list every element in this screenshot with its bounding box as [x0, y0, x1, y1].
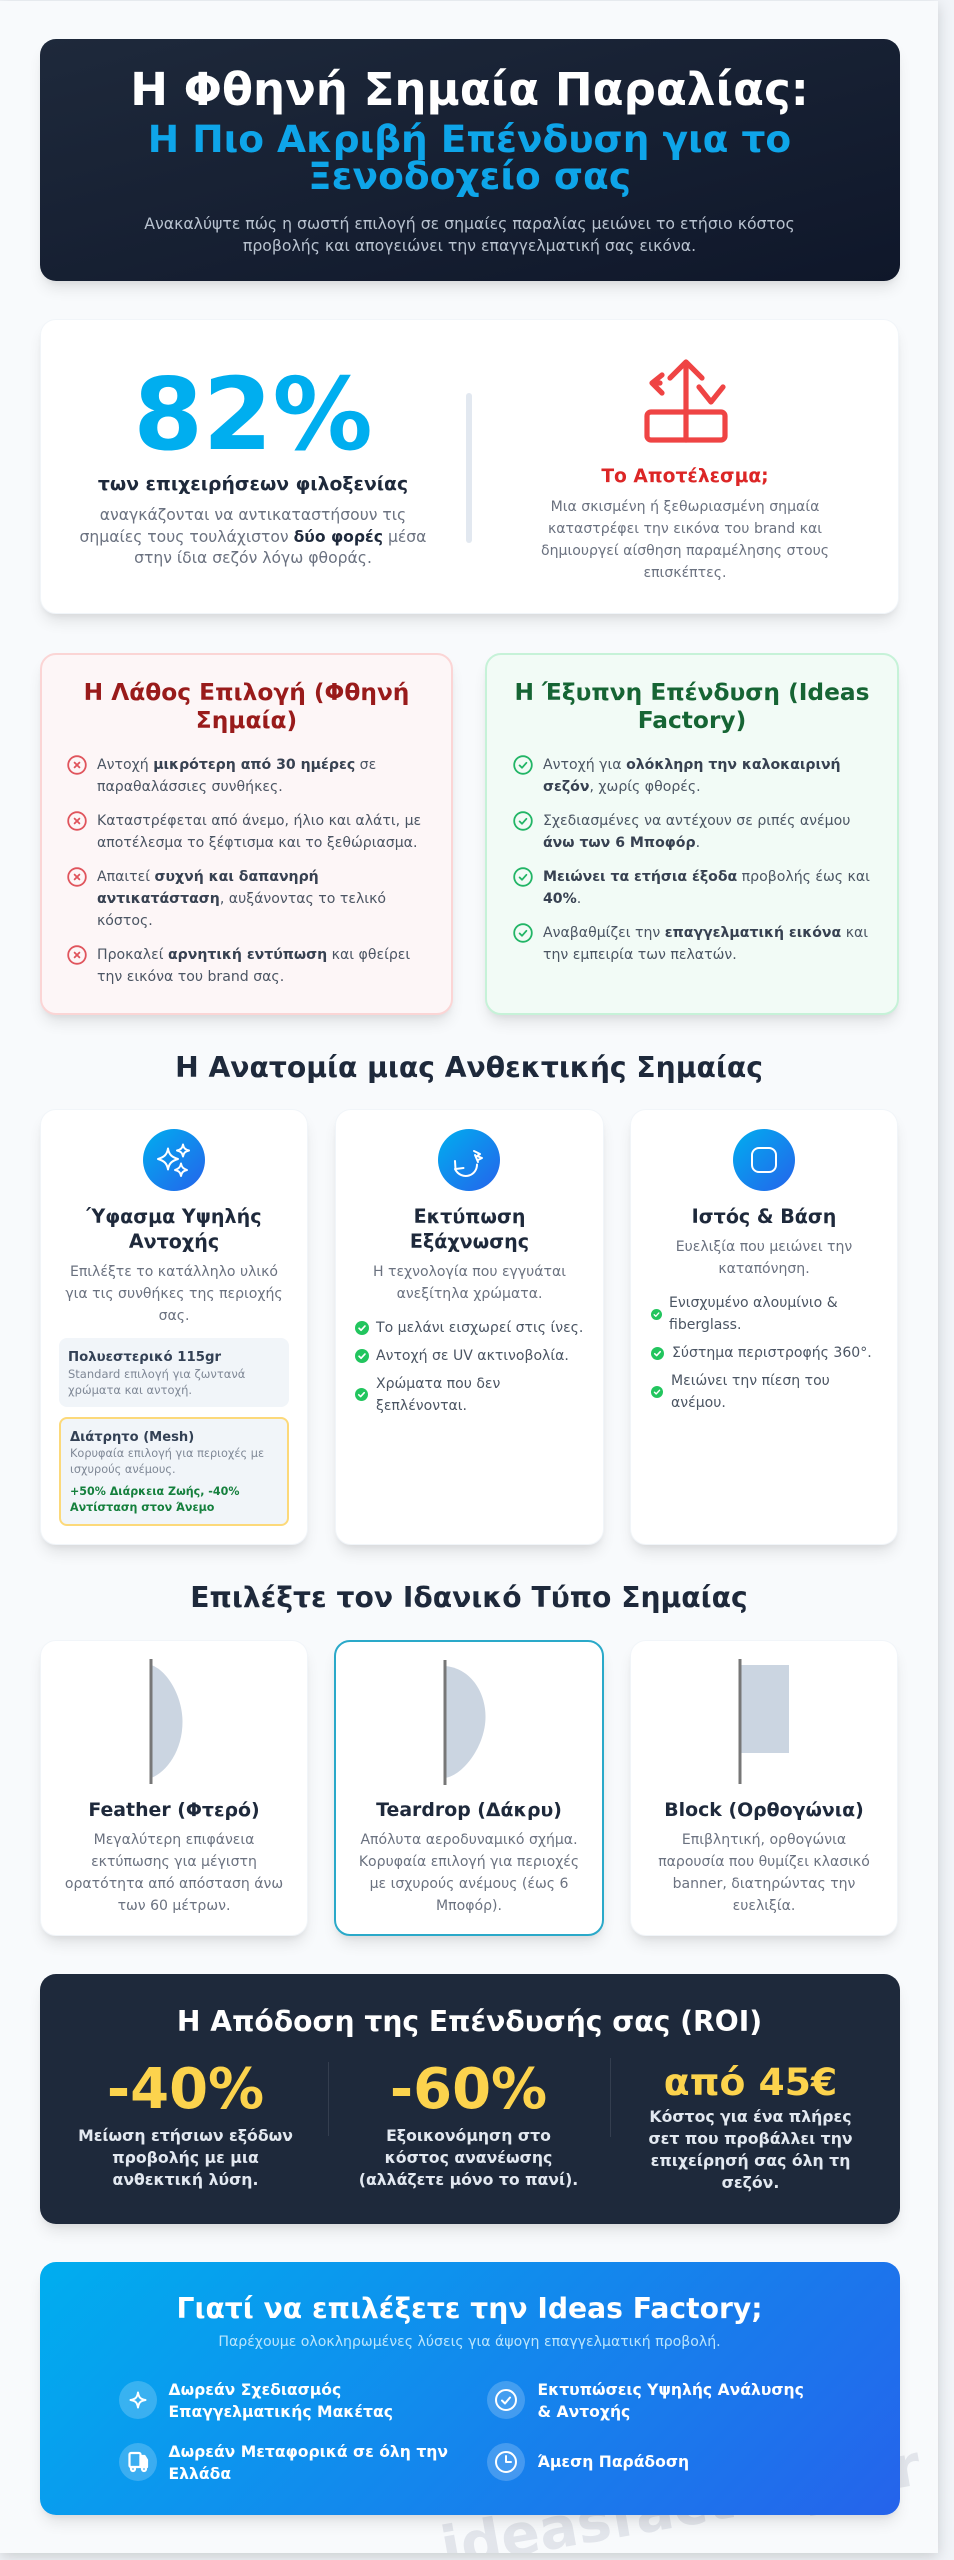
list item 1: [67, 755, 376, 795]
list item 3: [513, 867, 870, 907]
icon: truck: [118, 2443, 156, 2481]
item text: Ενισχυμένο αλουμίνιο &: [669, 1295, 838, 1311]
icon: sparkle: [118, 2381, 156, 2419]
card description: Ευελιξία που μειώνει την: [676, 1239, 852, 1255]
value: από 45€: [664, 2060, 837, 2104]
icon: check circle: [486, 2381, 524, 2419]
list item 2: [513, 811, 850, 851]
caption: [604, 2106, 896, 2194]
benefit: immediate delivery: [486, 2443, 886, 2487]
card description: εκτύπωσης για μέγιστη: [91, 1854, 257, 1870]
metric -60%: [322, 2059, 614, 2199]
item text: ανέμου.: [671, 1395, 726, 1411]
heading: Η Απόδοση της Επένδυσής σας (ROI): [177, 2005, 762, 2038]
caption: σετ που προβάλλει την: [648, 2129, 853, 2148]
caption: σεζόν.: [722, 2173, 779, 2192]
item text: Χρώματα που δεν: [376, 1376, 500, 1392]
option title: Πολυεστερικό 115gr: [68, 1350, 221, 1365]
caption: προβολής με μια: [112, 2148, 259, 2167]
illustration: teardrop flag: [336, 1642, 602, 1802]
item text: Μειώνει την πίεση του: [671, 1373, 830, 1389]
option benefit: [70, 1485, 240, 1514]
card description: Επιλέξτε το κατάλληλο υλικό: [70, 1264, 278, 1280]
illustration: feather flag: [41, 1641, 309, 1801]
text: σεζόν, χωρίς φθορές.: [543, 779, 701, 795]
icon: check circle: [513, 923, 533, 943]
icon: x circle: [67, 867, 87, 887]
card description: [65, 1264, 283, 1324]
icon: check: [651, 1386, 663, 1398]
intro text: Ανακαλύψτε πώς η σωστή επιλογή σε σημαίες παραλίας μειώνει το ετήσιο κόστος: [144, 214, 795, 233]
divider: [466, 393, 472, 543]
text: [538, 2379, 804, 2423]
benefit: free design: [118, 2381, 458, 2425]
icon: x circle: [67, 811, 87, 831]
card description: [336, 1829, 602, 1917]
list item 1: [513, 755, 841, 795]
option text: [68, 1367, 245, 1397]
icon: x circle: [67, 755, 87, 775]
item text: Αντοχή σε UV ακτινοβολία.: [376, 1348, 569, 1364]
text: [543, 925, 868, 963]
text: την εικόνα του brand σας.: [97, 969, 284, 985]
card title: Αντοχής: [129, 1230, 219, 1253]
section heading: flag types: Επιλέξτε τον Ιδανικό Τύπο Σημαίας: [190, 1581, 748, 1614]
metric -40%: [40, 2059, 332, 2199]
statistic description: σημαίες τους τουλάχιστον δύο φορές μέσα: [80, 528, 426, 546]
section heading: anatomy: Η Ανατομία μιας Ανθεκτικής Σημαίας: [175, 1051, 763, 1084]
heading: Factory): [638, 707, 746, 734]
card description: Μεγαλύτερη επιφάνεια: [94, 1832, 254, 1848]
item text: fiberglass.: [669, 1317, 741, 1333]
value: -40%: [107, 2057, 264, 2122]
value: -60%: [390, 2057, 547, 2122]
option: mesh: [59, 1417, 289, 1526]
statistic description: στην ίδια σεζόν λόγω φθοράς.: [134, 549, 372, 567]
option text: Standard επιλογή για ζωντανά: [68, 1367, 245, 1381]
text: Προκαλεί αρνητική εντύπωση και φθείρει: [97, 947, 410, 963]
text: άνω των 6 Μποφόρ.: [543, 835, 700, 851]
text: Αντοχή για ολόκληρη την καλοκαιρινή: [543, 757, 841, 773]
big number 82%: 82%: [133, 356, 373, 473]
card description: [631, 1829, 897, 1917]
panel: printing: [335, 1109, 604, 1545]
text: αντικατάσταση, αυξάνοντας το τελικό: [97, 891, 386, 907]
panel: wrong choice: [40, 653, 453, 1015]
title: Η Φθηνή Σημαία Παραλίας:: [130, 63, 809, 116]
subtitle highlight: Η Πιο Ακριβή Επένδυση για το: [148, 117, 791, 161]
card title: Εξάχνωσης: [410, 1230, 529, 1253]
panel: fabric: [40, 1109, 308, 1545]
text: [168, 2441, 448, 2485]
card title: [410, 1205, 529, 1253]
icon: x circle: [67, 945, 87, 965]
heading: Γιατί να επιλέξετε την Ideas Factory;: [176, 2292, 762, 2325]
option benefit: +50% Διάρκεια Ζωής, -40%: [70, 1485, 239, 1498]
card title: Feather (Φτερό): [88, 1799, 260, 1821]
caption: κόστος ανανέωσης: [385, 2148, 552, 2167]
text: [543, 757, 841, 795]
text: [97, 813, 421, 851]
icon: check: [651, 1347, 664, 1360]
item text: [376, 1373, 500, 1417]
statistic label: των επιχειρήσεων φιλοξενίας: [98, 474, 408, 495]
card description: Κορυφαία επιλογή για περιοχές: [359, 1854, 579, 1870]
text: παραθαλάσσιες συνθήκες.: [97, 779, 283, 795]
card title: Εκτύπωση: [414, 1205, 525, 1228]
divider: [610, 2058, 611, 2137]
card description: των 60 μέτρων.: [118, 1898, 230, 1914]
text: Απαιτεί συχνή και δαπανηρή: [97, 869, 319, 885]
panel: hero header: [40, 39, 900, 281]
card description: για τις συνθήκες της περιοχής: [65, 1286, 283, 1302]
text: Επαγγελματικής Μακέτας: [168, 2403, 393, 2421]
card description: ευελιξία.: [733, 1898, 795, 1914]
caption: (αλλάζετε μόνο το πανί).: [359, 2170, 578, 2189]
text: Δωρεάν Σχεδιασμός: [168, 2381, 341, 2399]
item text: [671, 1370, 830, 1414]
text: κόστος.: [97, 913, 153, 929]
list item 4: [67, 945, 410, 985]
icon: clock: [486, 2443, 524, 2481]
heading: [84, 679, 409, 734]
text: [97, 869, 386, 929]
heading: Η Έξυπνη Επένδυση (Ideas: [515, 679, 869, 706]
feature list: [336, 1316, 604, 1418]
text: [97, 947, 410, 985]
result heading: Το Αποτέλεσμα;: [601, 466, 769, 487]
caption: επιχείρησή σας όλη τη: [651, 2151, 850, 2170]
option text: ισχυρούς ανέμους.: [70, 1463, 176, 1476]
result description: επισκέπτες.: [643, 565, 727, 581]
statistic description: [80, 506, 426, 567]
card description: Η τεχνολογία που εγγυάται: [373, 1264, 566, 1280]
text: [97, 757, 376, 795]
heading: Η Λάθος Επιλογή (Φθηνή: [84, 679, 409, 706]
panel: pole and base: [630, 1109, 898, 1545]
card description: με ισχυρούς ανέμους (έως 6: [370, 1876, 568, 1892]
caption: Κόστος για ένα πλήρες: [649, 2107, 852, 2126]
card title: Block (Ορθογώνια): [664, 1799, 864, 1821]
card title: Teardrop (Δάκρυ): [376, 1799, 562, 1821]
subtitle highlight: [148, 117, 791, 198]
text: αποτέλεσμα το ξέφτισμα και το ξεθώριασμα.: [97, 835, 417, 851]
option title: Διάτρητο (Mesh): [70, 1430, 194, 1445]
card description: [631, 1236, 897, 1280]
card title: Ύφασμα Υψηλής: [86, 1205, 262, 1228]
text: Μειώνει τα ετήσια έξοδα προβολής έως και: [543, 869, 870, 885]
icon: refresh print: [438, 1129, 500, 1191]
icon: check: [355, 1349, 369, 1363]
card description: [41, 1829, 307, 1917]
card description: Επιβλητική, ορθογώνια: [682, 1832, 846, 1848]
panel: block flag: [630, 1640, 898, 1936]
panel: feather flag: [40, 1640, 308, 1936]
result description: [541, 499, 829, 581]
list item 3: [67, 867, 386, 929]
card description: banner, διατηρώντας την: [673, 1876, 855, 1892]
item text: Σύστημα περιστροφής 360°.: [672, 1345, 872, 1361]
benefit: free shipping: [118, 2443, 458, 2487]
illustration: block flag: [631, 1641, 899, 1801]
option text: [70, 1447, 264, 1476]
result description: καταστρέφει την εικόνα του brand και: [548, 521, 822, 537]
result description: δημιουργεί αίσθηση παραμέλησης στους: [541, 543, 829, 559]
item text: ξεπλένονται.: [376, 1398, 467, 1414]
option text: Κορυφαία επιλογή για περιοχές με: [70, 1447, 264, 1460]
icon: sparkles: [143, 1129, 205, 1191]
icon: check circle: [513, 811, 533, 831]
option benefit: Αντίσταση στον Άνεμο: [70, 1501, 214, 1514]
text: [543, 813, 850, 851]
icon: rounded square: [733, 1129, 795, 1191]
option text: χρώματα και αντοχή.: [68, 1383, 192, 1397]
caption: [40, 2125, 332, 2191]
text: Καταστρέφεται από άνεμο, ήλιο και αλάτι, με: [97, 813, 421, 829]
benefit: high resolution printing: [486, 2381, 886, 2425]
list item 2: [67, 811, 421, 851]
item text: Το μελάνι εισχωρεί στις ίνες.: [376, 1320, 583, 1336]
text: Ελλάδα: [168, 2465, 231, 2483]
card description: Απόλυτα αεροδυναμικό σχήμα.: [360, 1832, 578, 1848]
caption: Μείωση ετήσιων εξόδων: [78, 2126, 293, 2145]
panel: teardrop flag: [334, 1640, 604, 1936]
icon: torn flag warning: [644, 359, 728, 443]
text: [543, 869, 870, 907]
panel: smart investment: [485, 653, 899, 1015]
caption: [322, 2125, 614, 2191]
text: [168, 2379, 393, 2423]
card description: Μποφόρ).: [436, 1898, 502, 1914]
card description: ανεξίτηλα χρώματα.: [397, 1286, 542, 1302]
result description: Μια σκισμένη ή ξεθωριασμένη σημαία: [551, 499, 819, 515]
card title: [86, 1205, 262, 1253]
feature list: [631, 1292, 899, 1416]
text: Εκτυπώσεις Υψηλής Ανάλυσης: [538, 2381, 804, 2399]
panel: why Ideas Factory: [40, 2262, 900, 2515]
heading: Σημαία): [196, 707, 297, 734]
heading: [515, 679, 869, 734]
divider: [328, 2062, 329, 2136]
text: Άμεση Παράδοση: [538, 2453, 689, 2471]
text: 40%.: [543, 891, 581, 907]
icon: check circle: [513, 867, 533, 887]
intro text: [144, 214, 795, 255]
card description: καταπόνηση.: [718, 1261, 810, 1277]
list item 4: [513, 923, 868, 963]
card title: Ιστός & Βάση: [692, 1205, 836, 1228]
panel: ROI: [40, 1974, 900, 2224]
card description: [373, 1264, 566, 1302]
text: & Αντοχής: [538, 2403, 630, 2421]
text: Δωρεάν Μεταφορικά σε όλη την: [168, 2443, 448, 2461]
panel: key statistic: [40, 319, 899, 614]
metric from 45 euro: [604, 2059, 896, 2199]
statistic description: αναγκάζονται να αντικαταστήσουν τις: [100, 506, 406, 524]
option: polyester: [59, 1338, 289, 1407]
item text: [669, 1292, 838, 1336]
caption: ανθεκτική λύση.: [113, 2170, 258, 2189]
text: Αναβαθμίζει την επαγγελματική εικόνα και: [543, 925, 868, 941]
icon: check: [651, 1309, 662, 1320]
text: Αντοχή μικρότερη από 30 ημέρες σε: [97, 757, 376, 773]
card description: παρουσία που θυμίζει κλασικό: [658, 1854, 870, 1870]
subheading: Παρέχουμε ολοκληρωμένες λύσεις για άψογη επαγγελματική προβολή.: [218, 2334, 721, 2350]
text: Σχεδιασμένες να αντέχουν σε ριπές ανέμου: [543, 813, 850, 829]
subtitle highlight: Ξενοδοχείο σας: [308, 154, 631, 198]
icon: check: [355, 1321, 369, 1335]
icon: check: [355, 1388, 368, 1401]
icon: check circle: [513, 755, 533, 775]
text: την εμπειρία των πελατών.: [543, 947, 737, 963]
card description: σας.: [159, 1308, 189, 1324]
caption: Εξοικονόμηση στο: [386, 2126, 551, 2145]
intro text: προβολής και απογειώνει την επαγγελματική σας εικόνα.: [243, 236, 696, 255]
card description: ορατότητα από απόσταση άνω: [65, 1876, 283, 1892]
